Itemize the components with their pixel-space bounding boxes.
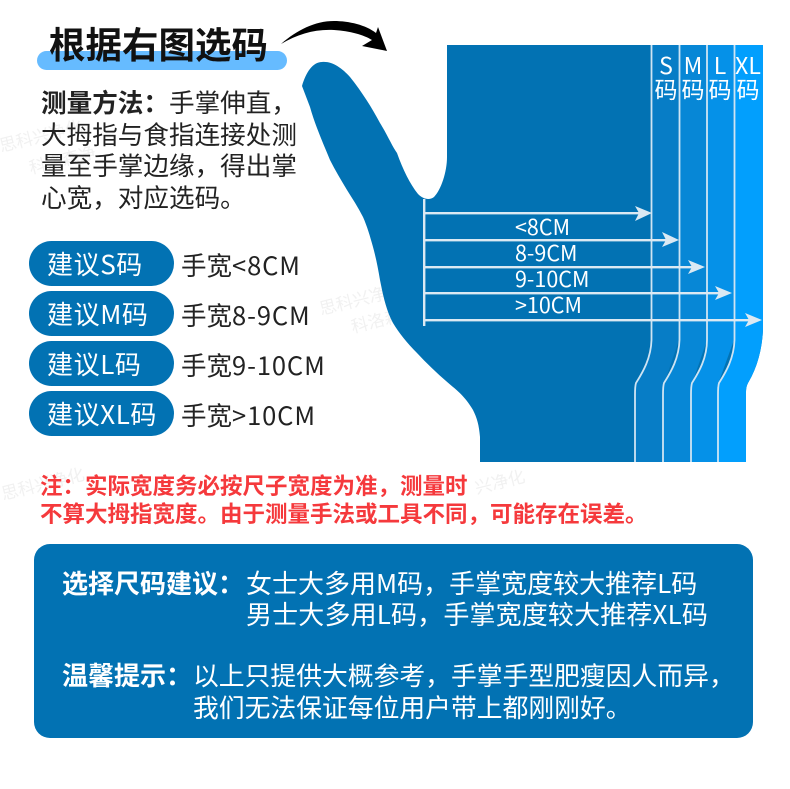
size suggestion L: 建议L码: [47, 345, 142, 382]
range labels: >10CM: [515, 289, 582, 320]
size suggestion XL: 建议XL码: [47, 395, 157, 432]
size column labels: 码: [682, 71, 704, 105]
size column labels: L: [714, 47, 726, 81]
curved arrow icon: [281, 21, 387, 51]
size column labels: M: [684, 47, 702, 81]
tip heading: 温馨提示：: [62, 656, 192, 693]
hand width S: 手宽<8CM: [181, 246, 301, 283]
size suggestion M: [29, 291, 174, 336]
size suggestion L: [29, 341, 174, 386]
size column labels: 码: [736, 71, 760, 105]
watermark text: 思科兴净化: [316, 275, 405, 320]
measurement method text: [41, 83, 297, 214]
measurement method text: 测量方法：手掌伸直，: [41, 83, 297, 120]
size advice women: 女士大多用M码，手掌宽度较大推荐L码: [246, 564, 697, 601]
watermark text: 兴净化: [472, 462, 527, 499]
size column labels: [654, 47, 761, 105]
watermark text: 科洛森净: [26, 138, 98, 179]
size advice men: 男士大多用L码，手掌宽度较大推荐XL码: [246, 595, 708, 632]
size column labels: 码: [708, 71, 732, 105]
size advice heading: 选择尺码建议：: [62, 564, 244, 601]
measurement arrows: [423, 199, 762, 327]
red note: [40, 469, 648, 529]
red note: 不算大拇指宽度。由于测量手法或工具不同，可能存在误差。: [40, 497, 648, 529]
range labels: [515, 211, 589, 320]
size suggestion M: 建议M码: [47, 295, 149, 332]
title: 根据右图选码: [49, 16, 268, 69]
size column labels: XL: [735, 47, 761, 81]
size column labels: 码: [654, 71, 678, 105]
measurement method text: 量至手掌边缘，得出掌: [41, 146, 297, 183]
range labels: 8-9CM: [515, 237, 578, 268]
title highlight bar: [37, 51, 287, 70]
tip line one: 以上只提供大概参考，手掌手型肥瘦因人而异，: [193, 656, 735, 693]
watermark text: 科洛森净: [348, 297, 420, 338]
advice panel: [34, 544, 753, 738]
hand diagram: [302, 45, 763, 462]
range labels: 9-10CM: [515, 263, 589, 294]
hand width L: 手宽9-10CM: [181, 346, 326, 383]
tip line two: 我们无法保证每位用户带上都刚刚好。: [193, 688, 632, 725]
hand width M: 手宽8-9CM: [181, 296, 311, 333]
watermark text: 思科兴净化: [0, 460, 87, 505]
size suggestion XL: [29, 391, 174, 436]
measurement method text: 心宽，对应选码。: [41, 178, 246, 214]
measurement method text: 大拇指与食指连接处测: [41, 114, 297, 152]
size suggestion S: [29, 241, 174, 286]
size column labels: S: [659, 47, 673, 81]
size suggestion S: 建议S码: [47, 245, 143, 282]
range labels: <8CM: [515, 211, 570, 242]
glove bands: [290, 40, 770, 470]
hand width XL: 手宽>10CM: [181, 396, 316, 433]
red note: 注：实际宽度务必按尺子宽度为准，测量时: [40, 469, 468, 501]
